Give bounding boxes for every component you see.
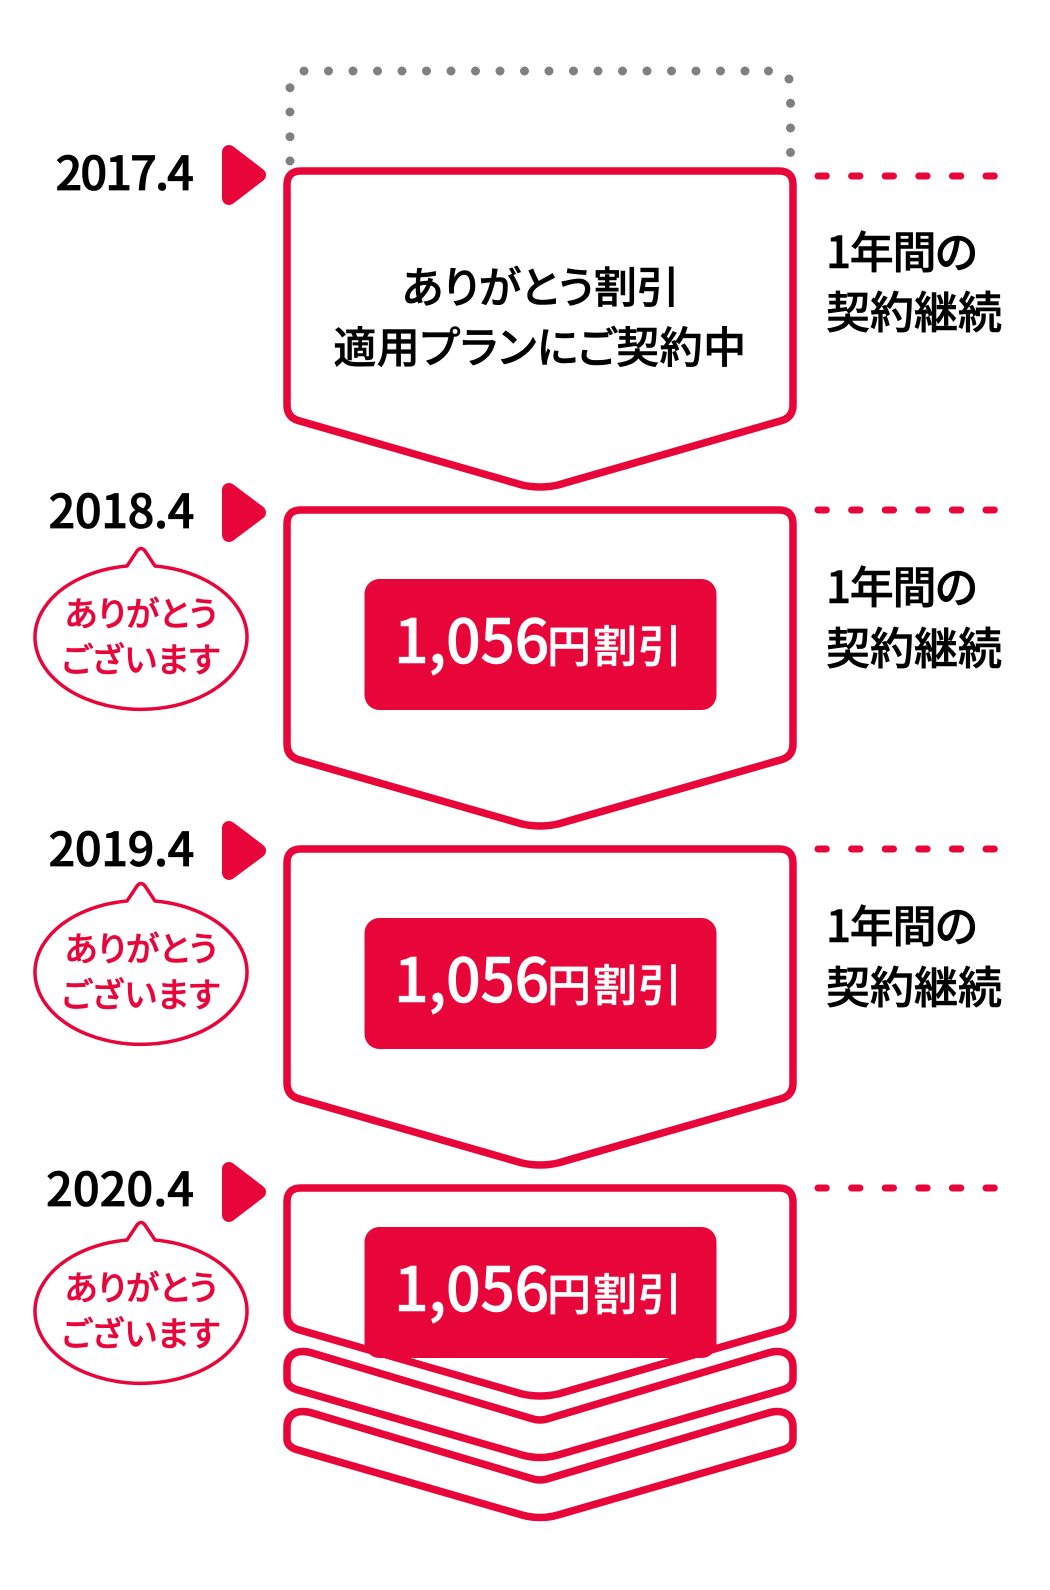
speech bubble: thanks 2018: ありがとう (65, 587, 217, 636)
text: plan description: ありがとう割引 (402, 254, 679, 316)
text: one-year renewal 1: 1年間の (826, 217, 976, 281)
stacked chevron: future year 2 (287, 1412, 793, 1518)
speech bubble: thanks 2020: ございます (61, 1307, 221, 1356)
text: one-year renewal 3: 1年間の (826, 891, 976, 955)
panel: current plan box (287, 171, 793, 487)
date label: 2019.4: 2019.4 (48, 811, 194, 880)
dashed divider: 2017.4 (818, 172, 998, 180)
text: one-year renewal 1 (826, 217, 1002, 341)
discount badge: 2019: 割引 (593, 950, 683, 1014)
discount badge: 2019 (364, 918, 716, 1049)
speech bubble: thanks 2018: ございます (61, 633, 221, 682)
panel: year 3 box (287, 849, 793, 1165)
arrow marker: 2018.4 (229, 490, 259, 535)
stacked chevron: future year 1 (287, 1352, 793, 1458)
discount badge: 2020: 割引 (593, 1259, 683, 1323)
text: plan description (333, 254, 747, 376)
date label: 2020.4: 2020.4 (46, 1151, 194, 1220)
discount badge: 2018 (364, 579, 716, 710)
arrow marker: 2020.4 (229, 1169, 259, 1215)
text: one-year renewal 3 (826, 891, 1002, 1016)
speech bubble: thanks 2020: ありがとう (65, 1261, 217, 1310)
discount badge: 2018: 円 (547, 611, 591, 675)
speech bubble: thanks 2020 (35, 1222, 247, 1383)
text: one-year renewal 3: 契約継続 (826, 952, 1002, 1016)
date label: 2018.4: 2018.4 (48, 473, 194, 542)
dashed divider: 2018.4 (818, 506, 998, 514)
discount badge: 2020: 円 (547, 1259, 591, 1323)
discount badge: 2020: 1,056 (394, 1240, 549, 1329)
discount badge: 2019: 1,056 (394, 931, 549, 1020)
dotted outline: previous contract period (286, 66, 795, 166)
panel: year 4 box (287, 1188, 793, 1396)
text: one-year renewal 2 (826, 552, 1002, 677)
discount badge: 2020 (364, 1227, 716, 1358)
speech bubble: thanks 2018 (35, 548, 247, 709)
date label: 2017.4: 2017.4 (55, 135, 193, 204)
speech bubble: thanks 2019 (35, 884, 247, 1044)
text: plan description: 適用プランにご契約中 (333, 314, 747, 376)
speech bubble: thanks 2019: ございます (61, 968, 221, 1017)
dashed divider: 2020.4 (818, 1184, 998, 1192)
arrow marker: 2019.4 (229, 828, 259, 873)
discount badge: 2019: 円 (547, 950, 591, 1014)
discount badge: 2018: 1,056 (394, 592, 549, 681)
speech bubble: thanks 2019: ありがとう (65, 922, 217, 971)
text: one-year renewal 2: 1年間の (826, 552, 976, 616)
text: one-year renewal 1: 契約継続 (826, 277, 1002, 341)
dashed divider: 2019.4 (818, 846, 998, 852)
text: one-year renewal 2: 契約継続 (826, 613, 1002, 677)
arrow marker: 2017.4 (229, 152, 259, 198)
panel: year 2 box (287, 510, 793, 826)
discount badge: 2018: 割引 (593, 611, 683, 675)
